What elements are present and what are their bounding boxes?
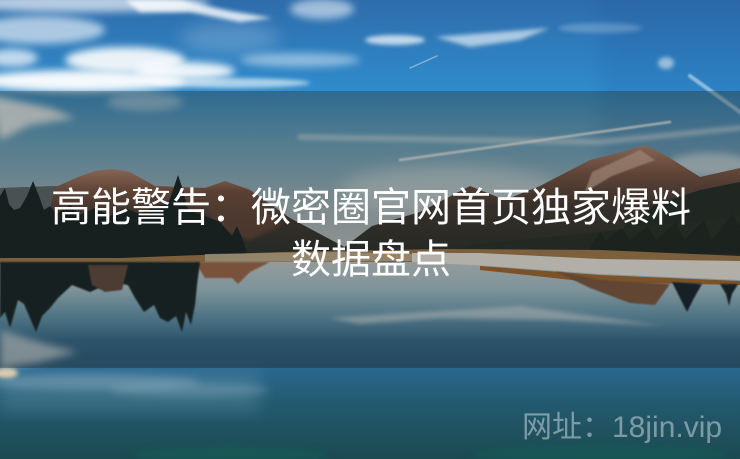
sky: [0, 0, 740, 260]
watermark url: 网址：18jin.vip: [522, 411, 722, 444]
sunlit glare at lake edge: [0, 368, 18, 378]
reflection of trees and mountains: [0, 262, 738, 332]
reflected clouds: [0, 306, 665, 397]
dark overlay band: [0, 91, 740, 368]
mountains: [0, 145, 740, 258]
jet contrails: [300, 56, 740, 160]
lake: [0, 258, 740, 459]
title: 高能警告：微密圈官网首页独家爆料数据盘点: [51, 186, 691, 282]
tree line: [0, 175, 740, 258]
clouds lower sky: [0, 93, 740, 214]
shoreline with snow band: [0, 249, 740, 285]
clouds upper sky: [0, 0, 674, 92]
